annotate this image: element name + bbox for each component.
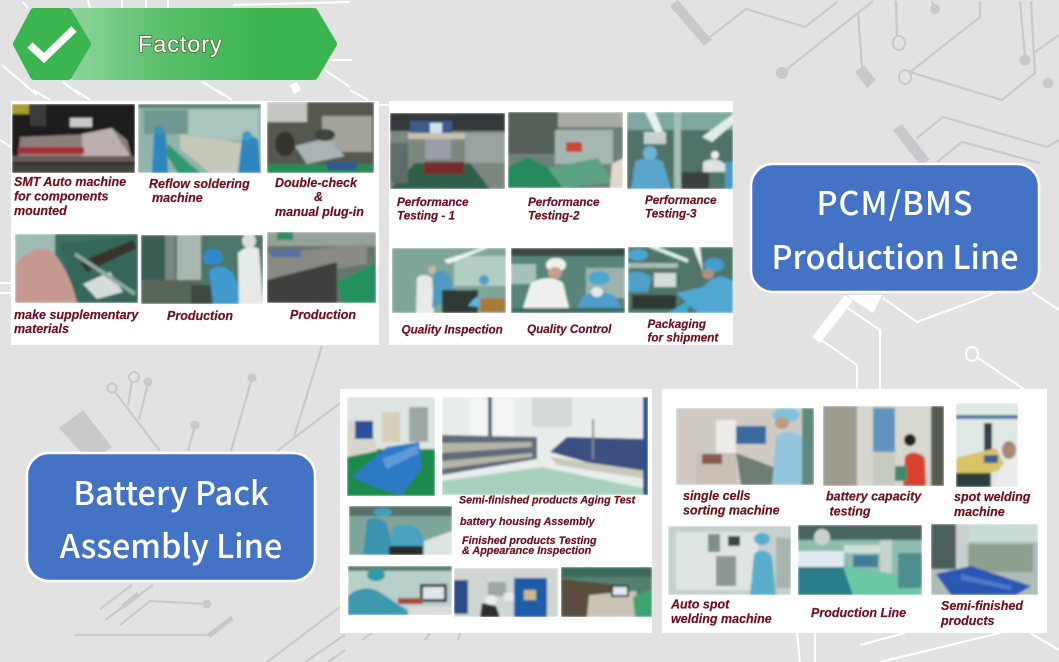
- callout: PCM/BMS production line: [751, 164, 1039, 292]
- captions: & Appearance Inspection: [462, 545, 592, 557]
- photo: production worker: [141, 235, 263, 304]
- captions: battery capacity: [826, 490, 922, 504]
- captions: for components: [14, 190, 108, 204]
- captions: Production: [167, 309, 233, 323]
- photo: computer operator: [348, 566, 452, 615]
- captions: products: [940, 614, 995, 628]
- photo: housing assembly: [349, 506, 452, 555]
- captions: Packaging: [648, 318, 706, 331]
- captions: welding machine: [671, 612, 772, 626]
- photo: reflow soldering: [138, 104, 261, 173]
- photo: capacity testing: [823, 406, 944, 486]
- captions: for shipment: [648, 332, 719, 344]
- captions: Semi-finished: [941, 599, 1023, 613]
- photo: performance testing 1: [390, 113, 505, 189]
- captions: Production Line: [811, 606, 906, 620]
- photo: performance testing 2: [508, 112, 623, 188]
- captions: Finished products Testing: [462, 535, 597, 547]
- photo: packaging: [628, 247, 733, 313]
- captions: Auto spot: [670, 598, 730, 612]
- callout: PCM/BMS production line: PCM/BMS: [816, 178, 974, 225]
- captions: manual plug-in: [275, 205, 364, 219]
- photo: quality inspection: [392, 248, 506, 313]
- photo: aging chamber and crates: [347, 397, 435, 496]
- photo: test chamber: [454, 568, 558, 617]
- icon: check mark hexagon: [17, 12, 87, 76]
- photo: aging test racks: [442, 397, 648, 495]
- photo: production line hall: [798, 525, 922, 595]
- captions: Quality Inspection: [402, 324, 503, 336]
- panel: PCM testing photos right: [389, 101, 733, 345]
- photo: cell sorting machine: [676, 408, 814, 485]
- captions: make supplementary: [14, 308, 139, 322]
- captions: Performance: [645, 194, 717, 207]
- captions: single cells: [683, 489, 750, 503]
- captions: Performance: [397, 196, 469, 209]
- callout: battery pack assembly line: Battery Pack: [73, 468, 269, 515]
- photo: production line: [267, 232, 376, 303]
- badge bar: [74, 12, 333, 76]
- captions: machine: [954, 505, 1005, 519]
- captions: Testing-3: [645, 208, 697, 220]
- captions: &: [314, 190, 323, 204]
- captions: Reflow soldering: [149, 177, 250, 191]
- captions: battery housing Assembly: [460, 516, 596, 528]
- captions: Testing-2: [528, 210, 580, 222]
- factory badge: [17, 12, 333, 76]
- captions: testing: [830, 504, 871, 518]
- captions: SMT Auto machine: [14, 175, 126, 189]
- captions: [459, 494, 636, 557]
- captions: Performance: [528, 196, 600, 209]
- callout: battery pack assembly line: [27, 453, 315, 581]
- photo: semi-finished products: [931, 524, 1038, 595]
- captions: [670, 489, 1031, 628]
- captions: materials: [14, 322, 69, 336]
- captions: Double-check: [275, 176, 358, 190]
- captions: [397, 194, 719, 344]
- captions: [14, 175, 364, 336]
- captions: Production: [290, 308, 356, 322]
- photo: supplementary materials: [15, 234, 138, 303]
- panel: PCM production photos left: [11, 101, 379, 345]
- photo: spot welding: [956, 403, 1018, 487]
- photo: SMT machine: [12, 104, 135, 173]
- captions: machine: [152, 191, 203, 205]
- captions: Semi-finished products Aging Test: [459, 494, 636, 506]
- captions: mounted: [14, 204, 67, 218]
- photo: inspection machine: [561, 567, 652, 617]
- callout: battery pack assembly line: Assembly Line: [60, 521, 282, 568]
- photo: quality control: [511, 248, 625, 313]
- panel: battery pack photos right: [662, 389, 1047, 633]
- captions: Quality Control: [527, 323, 612, 336]
- photo: auto spot welding: [668, 526, 791, 595]
- heading: Factory: Factory: [138, 31, 223, 57]
- photo: double-check: [267, 102, 374, 173]
- photo: performance testing 3: [627, 112, 733, 189]
- captions: spot welding: [954, 490, 1031, 504]
- captions: Testing - 1: [397, 210, 455, 222]
- callout: PCM/BMS production line: Production Line: [771, 232, 1019, 279]
- captions: sorting machine: [683, 504, 780, 518]
- panel: battery pack photos left: [340, 389, 652, 633]
